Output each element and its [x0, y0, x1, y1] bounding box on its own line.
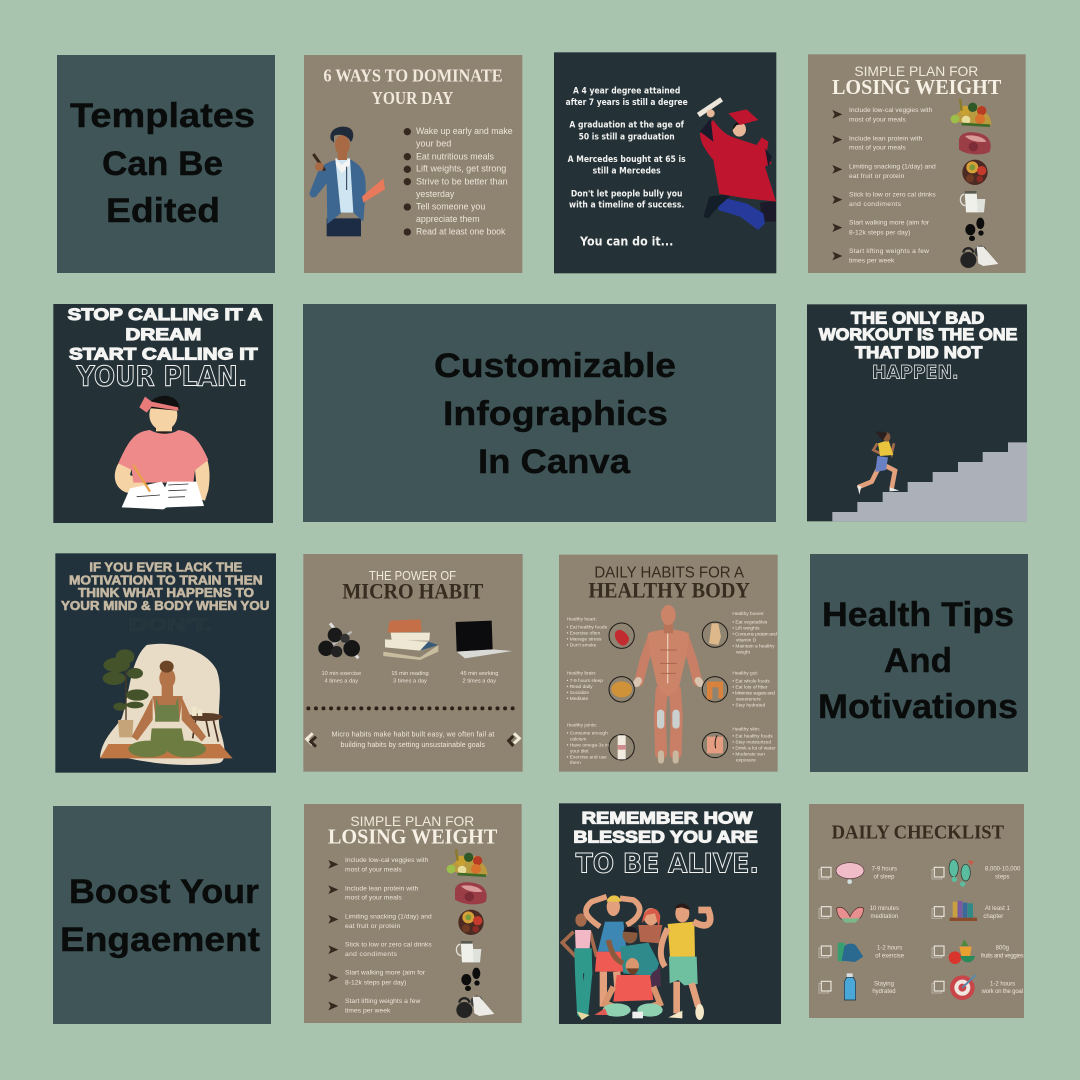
left column tips: calcium	[570, 736, 586, 742]
illustration: teacher	[309, 127, 385, 236]
left column tips: your diet	[570, 748, 589, 754]
food and fitness icons	[950, 99, 998, 268]
panel: simple plan for losing weight	[808, 54, 1026, 273]
plan list: 8-12k steps per day)	[345, 979, 406, 986]
icon: laptop	[456, 621, 512, 658]
right column tips: • Maintain a healthy	[732, 643, 775, 649]
heading: templates can be edited: Templates	[70, 97, 255, 135]
food and fitness icons	[446, 849, 494, 1018]
title: losing weight: SIMPLE PLAN FOR	[854, 63, 978, 79]
illustration: runner	[857, 431, 899, 495]
icon: fruit	[949, 939, 975, 964]
title: 6 ways	[323, 66, 503, 108]
checklist labels: 8,000-10,000	[985, 867, 1021, 873]
plan list: and condiments	[345, 951, 398, 958]
icon: lotus	[837, 907, 864, 923]
left column tips: • 7-9 hours sleep	[567, 678, 603, 684]
captions: 4 times a day	[325, 679, 358, 685]
checklist labels: chapter	[983, 914, 1003, 920]
plan list: times per week	[849, 257, 895, 264]
plan list: Stick to low or zero cal drinks	[849, 192, 936, 199]
plan list: Start walking more (aim for	[345, 970, 426, 977]
right column tips: vitamin D	[736, 637, 757, 643]
captions: 45 min working	[460, 671, 498, 677]
left column tips: Healthy brain:	[567, 670, 596, 676]
headline: YOUR MIND & BODY WHEN YOU	[61, 599, 269, 613]
heading: health tips: Health Tips	[822, 596, 1014, 634]
checklist labels: meditation	[871, 914, 898, 920]
message text	[332, 732, 494, 749]
plan list	[849, 107, 936, 264]
left column tips: • Have omega-3s in	[567, 743, 609, 749]
captions: 10 min exercise	[322, 671, 361, 677]
left column tips: • Don't smoke	[567, 643, 597, 649]
title: losing weight	[832, 63, 1001, 99]
plan list: Include low-cal veggies with	[345, 857, 429, 864]
title: 6 ways: YOUR DAY	[372, 88, 454, 108]
plan list: Start lifting weights a few	[849, 248, 929, 255]
icon: dumbbells	[318, 623, 360, 658]
left column tips: Healthy joints:	[567, 723, 597, 729]
right column tips: • Lift weights	[732, 625, 760, 631]
headline: THAT DID NOT	[855, 343, 982, 362]
heading: customizable infographics: Customizable	[434, 347, 676, 385]
headline: IF YOU EVER LACK THE	[89, 561, 242, 575]
checklist labels: At least 1	[985, 906, 1010, 912]
list: six habits: appreciate them	[416, 214, 480, 224]
right column tips: • Consume protein and	[732, 632, 777, 638]
headline: REMEMBER HOW	[582, 808, 753, 827]
arrows	[328, 860, 338, 1010]
plan list: and condiments	[849, 201, 902, 208]
plan list: Start walking more (aim for	[849, 220, 930, 227]
right column tips: Healthy gut:	[732, 670, 758, 676]
right column tips: • Stay moisturized	[732, 739, 771, 745]
organ icons	[609, 622, 728, 760]
left column tips: • Exercise and use	[567, 754, 607, 760]
list: six habits: Strive to be better than	[416, 176, 508, 186]
list: six habits: yesterday	[416, 189, 455, 199]
heading: health tips: And	[884, 642, 952, 680]
panel: 6 ways to dominate your day	[304, 55, 522, 273]
heading: customizable infographics: In Canva	[478, 443, 631, 481]
message text: Micro habits make habit built easy, we often fail at	[332, 732, 494, 739]
headline: TO BE ALIVE.	[576, 849, 759, 880]
panel: if you ever lack the motivation	[55, 553, 276, 773]
heading: boost your engaement: Boost Your	[69, 873, 259, 911]
plan list: Include lean protein with	[345, 885, 419, 892]
list: six habits: Wake up early and make	[416, 126, 513, 136]
title: losing weight: SIMPLE PLAN FOR	[350, 813, 474, 829]
panel: daily checklist	[809, 804, 1024, 1018]
right column tips: Healthy skin:	[732, 726, 760, 732]
captions: 3 times a day	[393, 679, 427, 685]
heading: templates can be edited: Edited	[106, 192, 220, 230]
right column tips: sweeteners	[736, 696, 761, 702]
checklist labels	[870, 867, 1024, 995]
right column tips: • Moderate sun	[732, 751, 765, 757]
panel: customizable infographics in canva	[303, 304, 776, 522]
plan list: eat fruit or protein	[345, 923, 401, 930]
heading: templates can be edited: Can Be	[102, 145, 223, 183]
left column tips: • Exercise often	[567, 631, 601, 637]
quote text: after 7 years is still a degree	[566, 98, 688, 108]
quote text: A 4 year degree attained	[573, 86, 680, 96]
title: micro habit: MICRO HABIT	[342, 579, 484, 603]
left column tips: them	[570, 760, 581, 766]
panel: stop calling it a dream	[53, 304, 273, 523]
right column tips: • Eat lots of fiber	[732, 684, 768, 690]
left column tips: • Consume enough	[567, 731, 608, 737]
illustration: anatomy figure	[637, 605, 700, 761]
right column tips: Healthy bones:	[732, 611, 765, 617]
quote text: still a Mercedes	[593, 166, 661, 176]
quote text: A Mercedes bought at 65 is	[568, 155, 686, 165]
illustration: meditation	[100, 644, 233, 765]
headline: HAPPEN.	[872, 363, 959, 384]
panel: you can do it	[554, 52, 776, 273]
plan list: Include low-cal veggies with	[849, 107, 933, 114]
title: healthy body: HEALTHY BODY	[588, 579, 750, 603]
headline: THE ONLY BAD	[851, 308, 984, 327]
headline: STOP CALLING IT A	[68, 305, 262, 324]
captions: 15 min reading	[391, 671, 429, 677]
left column tips: • Meditate	[567, 696, 589, 702]
headline: THINK WHAT HAPPENS TO	[78, 586, 254, 600]
captions	[322, 671, 498, 685]
icon: sleeping cloud	[836, 863, 864, 884]
chart-like stairs	[832, 442, 1027, 521]
headline: YOUR PLAN.	[76, 362, 247, 393]
icon: footprints	[949, 860, 974, 887]
plan list: most of your meals	[345, 866, 402, 873]
checklist labels: 7-9 hours	[872, 867, 897, 873]
checklist labels: work on the goal	[981, 989, 1023, 995]
list: six habits: Lift weights, get strong	[416, 164, 506, 174]
title: micro habit	[342, 569, 484, 603]
plan list: most of your meals	[849, 145, 906, 152]
checklist labels: hydrated	[872, 989, 896, 995]
right column tips: • Eat healthy foods	[732, 733, 773, 739]
headline: WORKOUT IS THE ONE	[819, 325, 1017, 344]
right column tips: • Stay hydrated	[732, 703, 765, 709]
list: six habits	[404, 126, 513, 237]
left column tips: • Eat healthy foods	[567, 625, 608, 631]
right column tips: exposure	[736, 757, 756, 763]
headline	[61, 561, 269, 634]
right column tips: • Eat vegetables	[732, 619, 768, 625]
title: 6 ways: 6 WAYS TO DOMINATE	[323, 66, 503, 86]
panel: the only bad workout	[807, 304, 1027, 521]
panel: templates can be edited	[57, 55, 275, 273]
arrows	[832, 110, 842, 260]
left column tips: Healthy heart:	[567, 617, 597, 623]
illustration: graduate	[698, 99, 776, 230]
message text: building habits by setting unsustainable goals	[340, 742, 485, 749]
headline: START CALLING IT	[69, 345, 258, 364]
plan list: 8-12k steps per day)	[849, 229, 910, 236]
list: six habits: Read at least one book	[416, 227, 506, 237]
title: micro habit: THE POWER OF	[369, 569, 456, 583]
checklist labels: fruits and veggies	[981, 954, 1024, 960]
icon: target	[950, 975, 976, 1000]
title: losing weight: LOSING WEIGHT	[328, 824, 497, 848]
list: six habits: your bed	[416, 139, 451, 149]
title: losing weight: LOSING WEIGHT	[832, 75, 1001, 99]
plan list: most of your meals	[849, 116, 906, 123]
heading: health tips: Motivations	[818, 688, 1018, 726]
plan list: Limiting snacking (1/day) and	[345, 914, 432, 921]
headline: DREAM	[125, 325, 201, 344]
right column tips: • Drink a lot of water	[732, 745, 776, 751]
panel: daily habits for a healthy body	[559, 555, 778, 772]
right column tips: • Minimize sugars and	[732, 690, 775, 696]
illustration: group of fit friends	[562, 895, 710, 1020]
heading: customizable infographics	[434, 347, 676, 481]
checklist labels: of exercise	[875, 954, 905, 960]
right column tips	[732, 611, 777, 763]
illustration: student writing	[115, 396, 210, 509]
title: daily checklist: DAILY CHECKLIST	[832, 821, 1005, 843]
checklist labels: Staying	[874, 981, 894, 987]
headline: MOTIVATION TO TRAIN THEN	[69, 573, 263, 587]
heading: boost your engaement: Engaement	[60, 921, 260, 959]
checklist labels: 1-2 hours	[990, 981, 1015, 987]
quote text: 50 is still a graduation	[579, 132, 675, 142]
heading: boost your engaement	[60, 873, 260, 959]
icon: water bottle	[844, 973, 856, 1000]
right column tips: weight	[736, 649, 751, 655]
quote text: A graduation at the age of	[569, 121, 684, 131]
title: healthy body	[588, 564, 750, 603]
left column tips: • Read daily	[567, 684, 593, 690]
checklist labels: steps	[995, 875, 1009, 881]
plan list: most of your meals	[345, 895, 402, 902]
quote text	[566, 86, 688, 248]
quote text: with a timeline of success.	[569, 201, 684, 211]
left column tips: • Manage stress	[567, 637, 602, 643]
checklist labels: 800g	[996, 946, 1009, 952]
title: losing weight	[328, 813, 497, 848]
panel: remember how blessed you are	[559, 803, 781, 1024]
left column tips	[567, 617, 609, 766]
checklist labels: 1-2 hours	[877, 946, 902, 952]
plan list: Include lean protein with	[849, 135, 923, 142]
plan list: Stick to low or zero cal drinks	[345, 942, 432, 949]
list: six habits: Tell someone you	[416, 202, 485, 212]
headline	[573, 808, 759, 880]
icon: left arrow	[307, 733, 316, 747]
headline: BLESSED YOU ARE	[573, 827, 758, 846]
plan list: eat fruit or protein	[849, 173, 905, 180]
panel: health tips and motivations	[810, 554, 1028, 772]
icon: backpack and bottle	[838, 943, 863, 962]
heading: templates can be edited	[70, 97, 255, 230]
checkboxes	[819, 867, 944, 993]
captions: 2 times a day	[463, 679, 496, 685]
panel: simple plan for losing weight repeat	[304, 804, 522, 1023]
dotted divider	[308, 702, 518, 714]
headline	[819, 308, 1017, 384]
headline: DON'T.	[129, 614, 212, 634]
plan list	[345, 857, 432, 1014]
plan list: Limiting snacking (1/day) and	[849, 164, 936, 171]
headline	[68, 305, 262, 393]
list: six habits: Eat nutritious meals	[416, 151, 494, 161]
icon: books	[383, 619, 438, 660]
right column tips: • Eat whole foods	[732, 679, 770, 685]
checklist labels: 10 minutes	[870, 906, 899, 912]
plan list: Start lifting weights a few	[345, 998, 421, 1005]
left column tips: • Socialize	[567, 690, 589, 696]
heading: health tips	[818, 596, 1018, 726]
checklist labels: of sleep	[874, 875, 895, 881]
heading: customizable infographics: Infographics	[443, 395, 668, 433]
icon: right arrow	[509, 733, 519, 746]
panel: boost your engagement	[53, 806, 271, 1024]
icon: bookshelf	[950, 901, 977, 921]
plan list: times per week	[345, 1007, 391, 1014]
quote text: You can do it...	[579, 234, 673, 248]
panel: the power of micro habit	[303, 554, 523, 772]
quote text: Don't let people bully you	[571, 189, 682, 199]
title: healthy body: DAILY HABITS FOR A	[594, 564, 745, 581]
